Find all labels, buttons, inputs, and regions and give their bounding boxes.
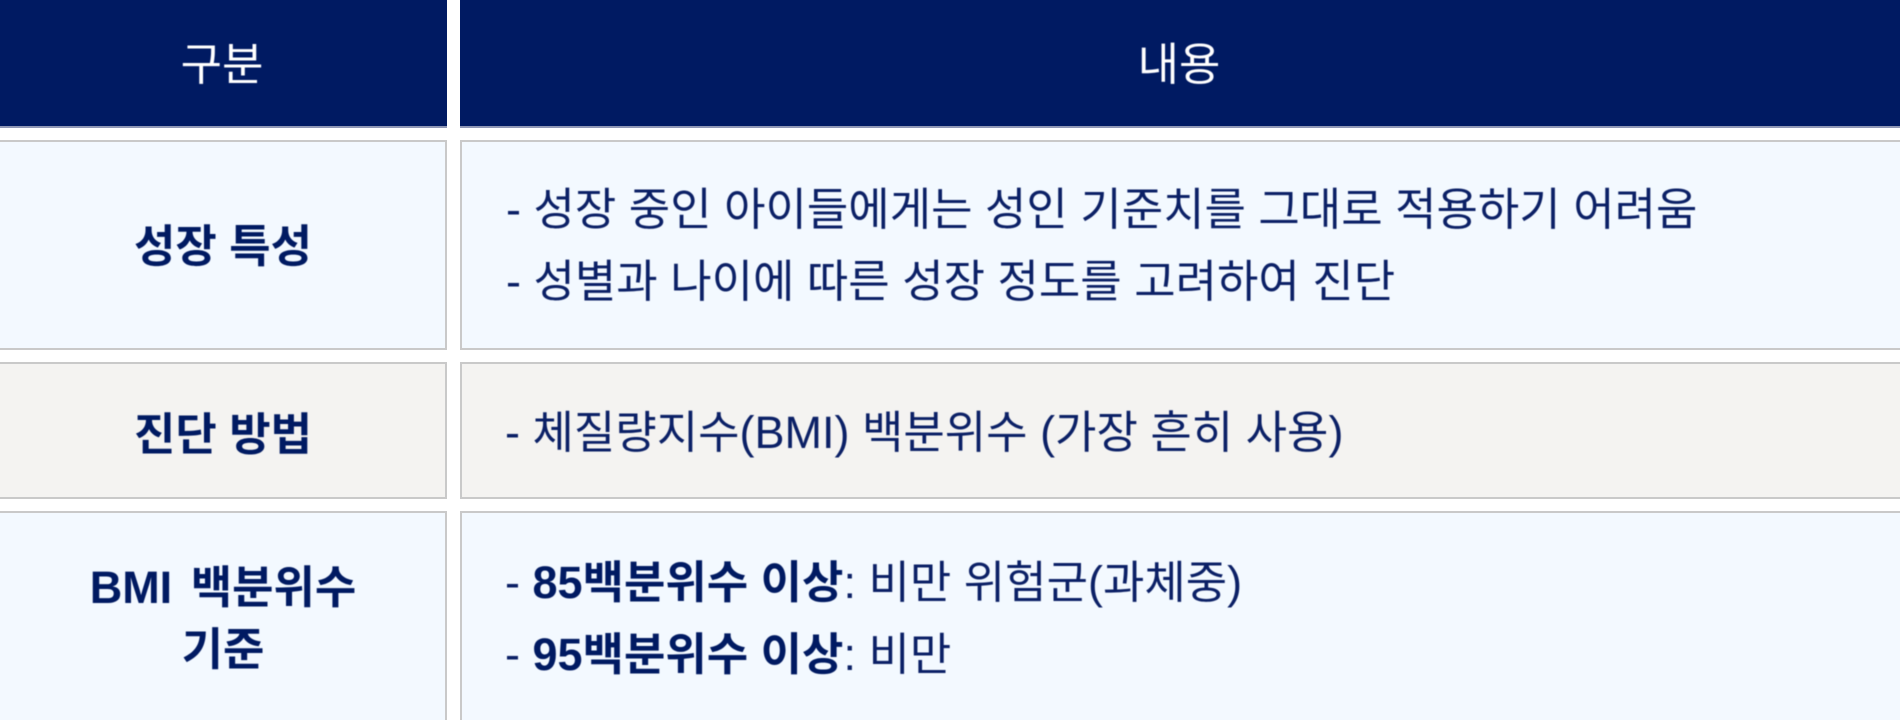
row content: diagnosis method — [460, 362, 1900, 499]
row label: BMI percentile criteria — [0, 511, 447, 720]
row content: growth characteristics: - 성별과 나이에 따른 성장 정도를 고려하여 진단 — [506, 256, 1395, 307]
row label: growth characteristics — [0, 140, 447, 350]
table header: content: 내용 — [1138, 39, 1220, 90]
table header: category: 구분 — [181, 39, 263, 90]
row content: growth characteristics — [460, 140, 1900, 350]
row label: growth characteristics: 성장 특성 — [134, 221, 312, 272]
row content: growth characteristics: - 성장 중인 아이들에게는 성인 기준치를 그대로 적용하기 어려움 — [506, 184, 1697, 235]
row content: BMI percentile criteria: - 95백분위수 이상: 비만 — [505, 629, 951, 680]
row content: BMI percentile criteria: - 85백분위수 이상: 비만 위험군(과체중) — [505, 557, 1242, 608]
row label: BMI percentile criteria: 기준 — [182, 624, 264, 675]
row label: diagnosis method: 진단 방법 — [134, 409, 312, 460]
table header: content — [460, 0, 1900, 128]
row content: BMI percentile criteria — [460, 511, 1900, 720]
row label: diagnosis method — [0, 362, 447, 499]
table header: category — [0, 0, 447, 128]
row label: BMI percentile criteria: BMI 백분위수 — [90, 562, 356, 613]
row content: diagnosis method: - 체질량지수(BMI) 백분위수 (가장 흔히 사용) — [505, 407, 1343, 458]
